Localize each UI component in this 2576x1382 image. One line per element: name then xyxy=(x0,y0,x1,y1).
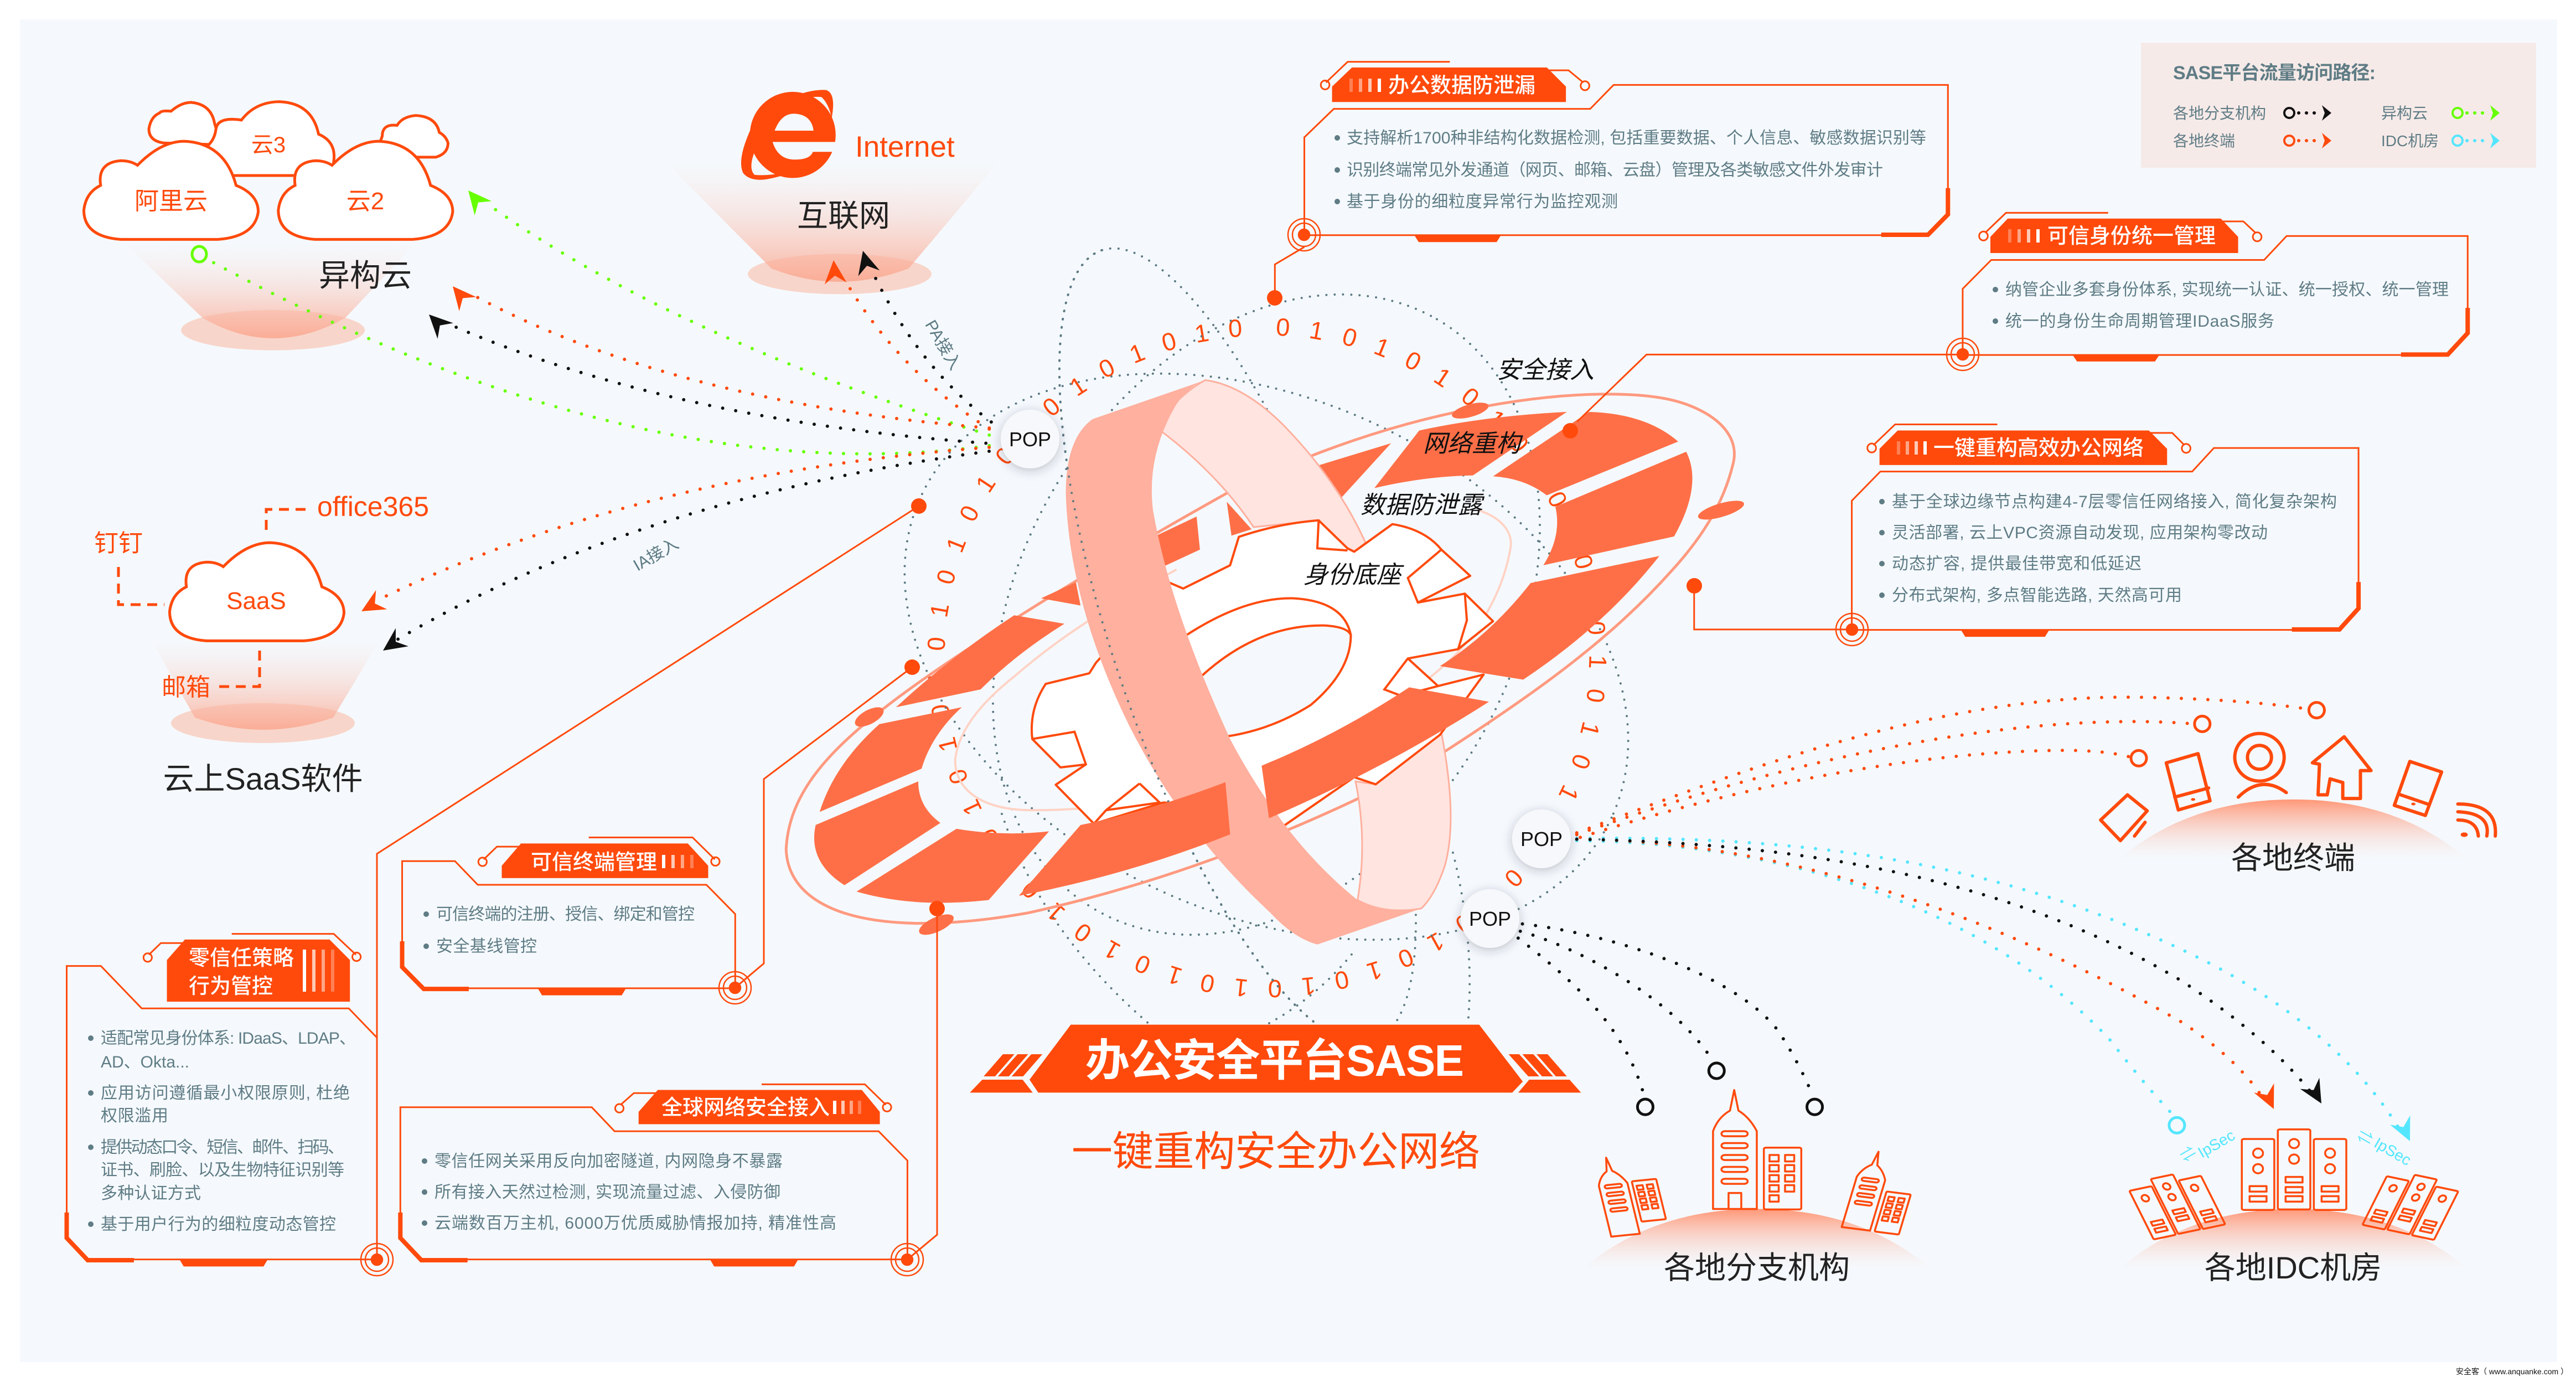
arrowheads xyxy=(2254,1083,2284,1113)
band segments right and left xyxy=(1374,412,1567,488)
legend xyxy=(2141,43,2536,168)
clouds xyxy=(84,102,453,239)
panel: 一键重构高效办公网络 xyxy=(1694,425,2358,646)
dashed connectors xyxy=(118,509,307,687)
panel bullets: 多种认证方式 xyxy=(101,1184,201,1203)
target node xyxy=(719,972,751,1004)
POP 2: POP xyxy=(1520,828,1563,850)
band segments behind xyxy=(1041,582,1080,606)
section: cloud SaaS xyxy=(94,491,429,796)
section: terminals xyxy=(2101,734,2495,875)
target node xyxy=(1836,613,1868,646)
panel bullets: 权限滥用 xyxy=(101,1107,168,1125)
panel bullets: 分布式架构, 多点智能选路, 天然高可用 xyxy=(1892,586,2182,605)
dotted orbits xyxy=(813,196,1720,1080)
legend item: terminals xyxy=(2173,132,2331,149)
label: 钉钉: 钉钉 xyxy=(94,530,143,557)
funnel under SaaS xyxy=(149,637,382,743)
funnel under internet xyxy=(661,157,1002,294)
legend item: terminals: 各地终端 xyxy=(2173,132,2235,149)
main title banner xyxy=(970,1025,1581,1092)
panel bullets xyxy=(422,1152,836,1233)
panel bullets: 适配常见身份体系: IDaaS、LDAP、 xyxy=(101,1029,356,1048)
target node xyxy=(1947,338,1979,370)
panel bullets: 统一的身份生命周期管理IDaaS服务 xyxy=(2005,312,2274,331)
panel: 可信身份统一管理 xyxy=(1577,213,2468,421)
panel bullets: 提供动态口令、短信、邮件、扫码、 xyxy=(101,1138,344,1157)
labels: platform layers xyxy=(1303,357,1594,589)
hill xyxy=(2117,800,2470,861)
legend title: SASE平台流量访问路径: xyxy=(2173,63,2376,84)
hill xyxy=(1580,1209,1933,1271)
label: IpSec left xyxy=(2177,1126,2238,1166)
heading: 异构云: 异构云 xyxy=(319,258,412,293)
standing band front xyxy=(1066,380,1421,945)
heading: 各地终端: 各地终端 xyxy=(2231,840,2355,875)
panel bullets xyxy=(1879,493,2337,605)
icons: servers xyxy=(2126,1130,2461,1240)
section: heterogeneous cloud: 云3 xyxy=(251,133,286,157)
panel: 可信终端管理 xyxy=(402,838,751,1004)
dotted paths to clouds and internet xyxy=(208,203,991,454)
section: IDC xyxy=(2117,1126,2470,1285)
frame xyxy=(400,1084,907,1266)
label: IpSec right: IpSec xyxy=(2371,1134,2414,1169)
panel title: 一键重构高效办公网络 xyxy=(1933,437,2144,460)
panel bullets: 所有接入天然过检测, 实现流量过滤、入侵防御 xyxy=(434,1183,780,1201)
label: IpSec right: ⇌ xyxy=(2354,1126,2376,1149)
ring outline xyxy=(786,394,1734,924)
central diagram: tilted ring xyxy=(786,380,1734,945)
subtitle: 一键重构安全办公网络 xyxy=(1072,1128,1480,1174)
section: heterogeneous cloud xyxy=(84,102,453,350)
panel bullets: 应用访问遵循最小权限原则, 杜绝 xyxy=(101,1084,350,1102)
header bars xyxy=(1897,441,1927,455)
target node xyxy=(361,1244,393,1276)
panel title: 办公数据防泄漏 xyxy=(1388,74,1535,97)
icons: devices xyxy=(2101,734,2495,840)
label: IpSec left: ⇌ xyxy=(2177,1143,2199,1166)
dotted orbit over the band xyxy=(1059,250,1374,1043)
inner pale ring xyxy=(955,510,1511,810)
panel bullets: 可信终端的注册、授信、绑定和管控 xyxy=(436,905,695,924)
legend item: branches: 各地分支机构 xyxy=(2173,105,2266,122)
panel bullets: 零信任网关采用反向加密隧道, 内网隐身不暴露 xyxy=(434,1152,783,1170)
panel title xyxy=(189,947,294,998)
label: PA接入: PA接入 xyxy=(921,317,964,373)
panel: 办公数据防泄漏 xyxy=(1275,62,1948,292)
label: 数据防泄露: 数据防泄露 xyxy=(1361,492,1485,519)
panel bullets: 云端数百万主机, 6000万优质威胁情报加持, 精准性高 xyxy=(434,1214,836,1233)
label: 网络重构: 网络重构 xyxy=(1423,430,1523,457)
POP 1 xyxy=(1001,410,1059,468)
frame and connector xyxy=(1275,62,1948,292)
POP 1: POP xyxy=(1009,428,1051,451)
panel title: 可信身份统一管理 xyxy=(2047,225,2216,248)
gear tooth details xyxy=(1032,520,1467,824)
panel: 全球网络安全接入 xyxy=(400,1084,923,1276)
label: 邮箱: 邮箱 xyxy=(162,674,210,701)
frame xyxy=(66,934,377,1266)
panel: 零信任策略行为管控 xyxy=(66,934,393,1276)
red connector dots xyxy=(904,290,1702,916)
POP 3 xyxy=(1461,889,1519,948)
section: internet xyxy=(661,90,1002,294)
panel bullets: 灵活部署, 云上VPC资源自动发现, 应用架构零改动 xyxy=(1892,524,2268,542)
panel bullets: 基于用户行为的细粒度动态管控 xyxy=(101,1215,336,1234)
panel bullets: 基于全球边缘节点构建4-7层零信任网络接入, 简化复杂架构 xyxy=(1892,493,2337,511)
heading: 各地分支机构: 各地分支机构 xyxy=(1664,1250,1850,1285)
header bars xyxy=(1349,79,1381,92)
label: office365: office365 xyxy=(317,491,429,522)
panel title: 零信任策略 xyxy=(189,947,294,970)
label: 身份底座: 身份底座 xyxy=(1303,561,1404,589)
dotted paths to terminals and data centers xyxy=(1518,697,2401,1133)
traffic paths: lower right xyxy=(1518,697,2420,1146)
funnel under clouds xyxy=(121,239,419,350)
start ring: cloud xyxy=(192,246,206,262)
panel title: 可信终端管理 xyxy=(531,851,657,874)
header bars xyxy=(662,855,694,868)
target node xyxy=(1288,219,1320,251)
header bars xyxy=(2008,229,2040,243)
panel bullets: 识别终端常见外发通道（网页、邮箱、云盘）管理及各类敏感文件外发审计 xyxy=(1347,161,1883,179)
section: heterogeneous cloud: 云2 xyxy=(346,188,384,215)
gear hole xyxy=(1200,626,1351,737)
dotted paths to SaaS xyxy=(376,447,989,601)
legend item: IDC xyxy=(2381,132,2500,149)
header bars xyxy=(833,1101,861,1114)
icon: internet e xyxy=(741,90,839,180)
label: IA接入: IA接入 xyxy=(630,534,682,575)
label: IpSec left: IpSec xyxy=(2195,1126,2238,1161)
title text: 办公安全平台SASE xyxy=(1085,1036,1464,1085)
label: 安全接入: 安全接入 xyxy=(1497,357,1594,384)
legend item: heterogeneous cloud: 异构云 xyxy=(2381,105,2428,122)
hill xyxy=(2117,1209,2470,1271)
orbit nodes xyxy=(850,399,1749,938)
icons: buildings xyxy=(1592,1090,1922,1237)
panel bullets: 支持解析1700种非结构化数据检测, 包括重要数据、个人信息、敏感数据识别等 xyxy=(1347,129,1926,147)
legend item: IDC: IDC机房 xyxy=(2381,132,2439,149)
label: IpSec right xyxy=(2354,1126,2414,1169)
panel bullets xyxy=(88,1029,356,1234)
traffic paths: upper left xyxy=(192,183,991,659)
panel bullets: 纳管企业多套身份体系, 实现统一认证、统一授权、统一管理 xyxy=(2005,281,2449,299)
section: branches xyxy=(1580,1090,1933,1285)
panel title: 行为管控 xyxy=(189,975,273,998)
POP 3: POP xyxy=(1469,907,1511,930)
frame and connector xyxy=(1577,213,2468,421)
target node xyxy=(891,1244,923,1276)
panel bullets: 动态扩容, 提供最佳带宽和低延迟 xyxy=(1892,555,2142,573)
heading: 云上SaaS软件: 云上SaaS软件 xyxy=(163,761,363,796)
label: Internet: Internet xyxy=(855,131,955,163)
cloud labels: 阿里云 xyxy=(135,188,208,215)
panel bullets xyxy=(423,905,695,956)
connectors to lower-left panels xyxy=(377,506,937,1260)
panel title: 全球网络安全接入 xyxy=(661,1096,830,1120)
arrowheads xyxy=(460,183,492,215)
frame xyxy=(402,838,735,996)
banner shapes xyxy=(970,1025,1581,1092)
header bars xyxy=(303,950,334,992)
panel bullets: 安全基线管控 xyxy=(436,937,537,956)
label: SaaS: SaaS xyxy=(226,587,286,615)
POP nodes xyxy=(1001,410,1571,948)
panel bullets: AD、Okta... xyxy=(101,1053,189,1071)
panel bullets xyxy=(1993,281,2449,331)
panel bullets: 基于身份的细粒度异常行为监控观测 xyxy=(1347,193,1618,211)
cloud: SaaS xyxy=(169,543,344,641)
frame and connector xyxy=(1694,425,2358,637)
POP 2 xyxy=(1512,809,1571,868)
standing band back xyxy=(1156,380,1365,551)
heading: 各地IDC机房: 各地IDC机房 xyxy=(2205,1250,2382,1285)
heading: 互联网: 互联网 xyxy=(797,198,890,233)
watermark: 安全客（ www.anquanke.com ） xyxy=(2456,1367,2568,1376)
central diagram: front segments and nodes xyxy=(850,399,1749,938)
panel bullets xyxy=(1334,129,1926,211)
band segments front xyxy=(1019,782,1230,896)
gear xyxy=(1032,520,1493,826)
legend item: heterogeneous cloud xyxy=(2381,105,2500,122)
panel bullets: 证书、刷脸、以及生物特征识别等 xyxy=(101,1161,344,1179)
legend item: branches xyxy=(2173,105,2331,122)
